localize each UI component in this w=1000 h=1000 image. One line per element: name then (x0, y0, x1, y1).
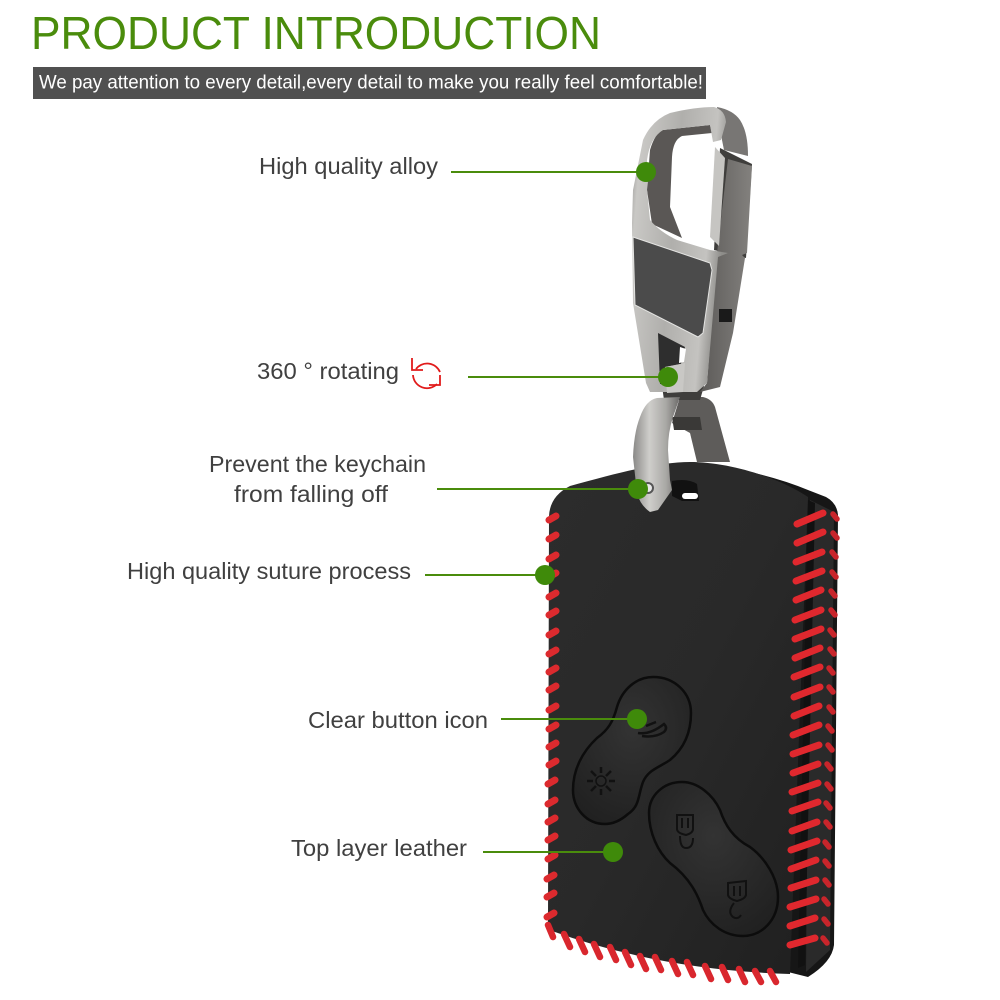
callout: high quality alloy (259, 153, 656, 182)
lower button group (649, 782, 778, 936)
fob side strip (806, 500, 834, 972)
carabiner leather plate (633, 237, 712, 337)
callout: 360 rotating (257, 358, 678, 387)
subtitle band: We pay attention to every detail,every detail to make you really feel comfortable! (39, 72, 703, 94)
button icon: light (587, 767, 615, 795)
far right stitching (823, 514, 837, 943)
carabiner square detail (719, 309, 732, 322)
left stitching (547, 516, 556, 917)
fob front face (548, 462, 808, 974)
callout: top layer leather (291, 835, 623, 862)
icon: rotation arrows (412, 358, 440, 388)
swivel ring screw (643, 483, 653, 493)
callout: clear button icon: Clear button icon (308, 707, 488, 733)
carabiner gate backing (714, 148, 752, 258)
callout: prevent the keychain from falling off (209, 451, 648, 507)
swivel opening (670, 433, 696, 461)
carabiner slot highlight (679, 347, 686, 363)
carabiner hook back (717, 107, 748, 156)
callout: top layer leather: Top layer leather (291, 835, 467, 861)
product: key fob cover with carabiner keychain (547, 107, 838, 982)
fob side edge (690, 462, 838, 977)
right stitching (790, 513, 823, 945)
callout: prevent the keychain from falling off: from falling off (234, 481, 388, 507)
button icon: car trunk (638, 722, 666, 736)
button icon: unlock (677, 815, 693, 848)
subtitle band (33, 67, 706, 99)
button icon: lock (728, 881, 746, 918)
swivel ring right arm (672, 397, 730, 462)
fob hole (672, 480, 699, 501)
fob hole highlight (682, 493, 698, 499)
carabiner link (665, 363, 685, 393)
callout: prevent the keychain from falling off: Prevent the keychain (209, 451, 426, 477)
title: PRODUCT INTRODUCTION (31, 7, 601, 59)
carabiner front body (632, 107, 728, 392)
carabiner lower slot (658, 333, 685, 384)
carabiner gate (710, 147, 725, 246)
swivel ring left arm (633, 397, 680, 512)
fob inner groove (798, 500, 815, 968)
callout: high quality alloy: High quality alloy (259, 153, 438, 179)
callout: 360 rotating: 360 ° rotating (257, 358, 399, 384)
upper button group (573, 677, 691, 824)
callout: high quality suture process: High quality suture process (127, 558, 411, 584)
callout: clear button icon (308, 707, 647, 733)
bottom stitching (548, 925, 776, 982)
swivel connector (662, 386, 704, 400)
callout: high quality suture process (127, 558, 555, 585)
carabiner side bar (700, 159, 752, 392)
swivel spring (672, 417, 702, 430)
carabiner inner recess (647, 125, 712, 238)
